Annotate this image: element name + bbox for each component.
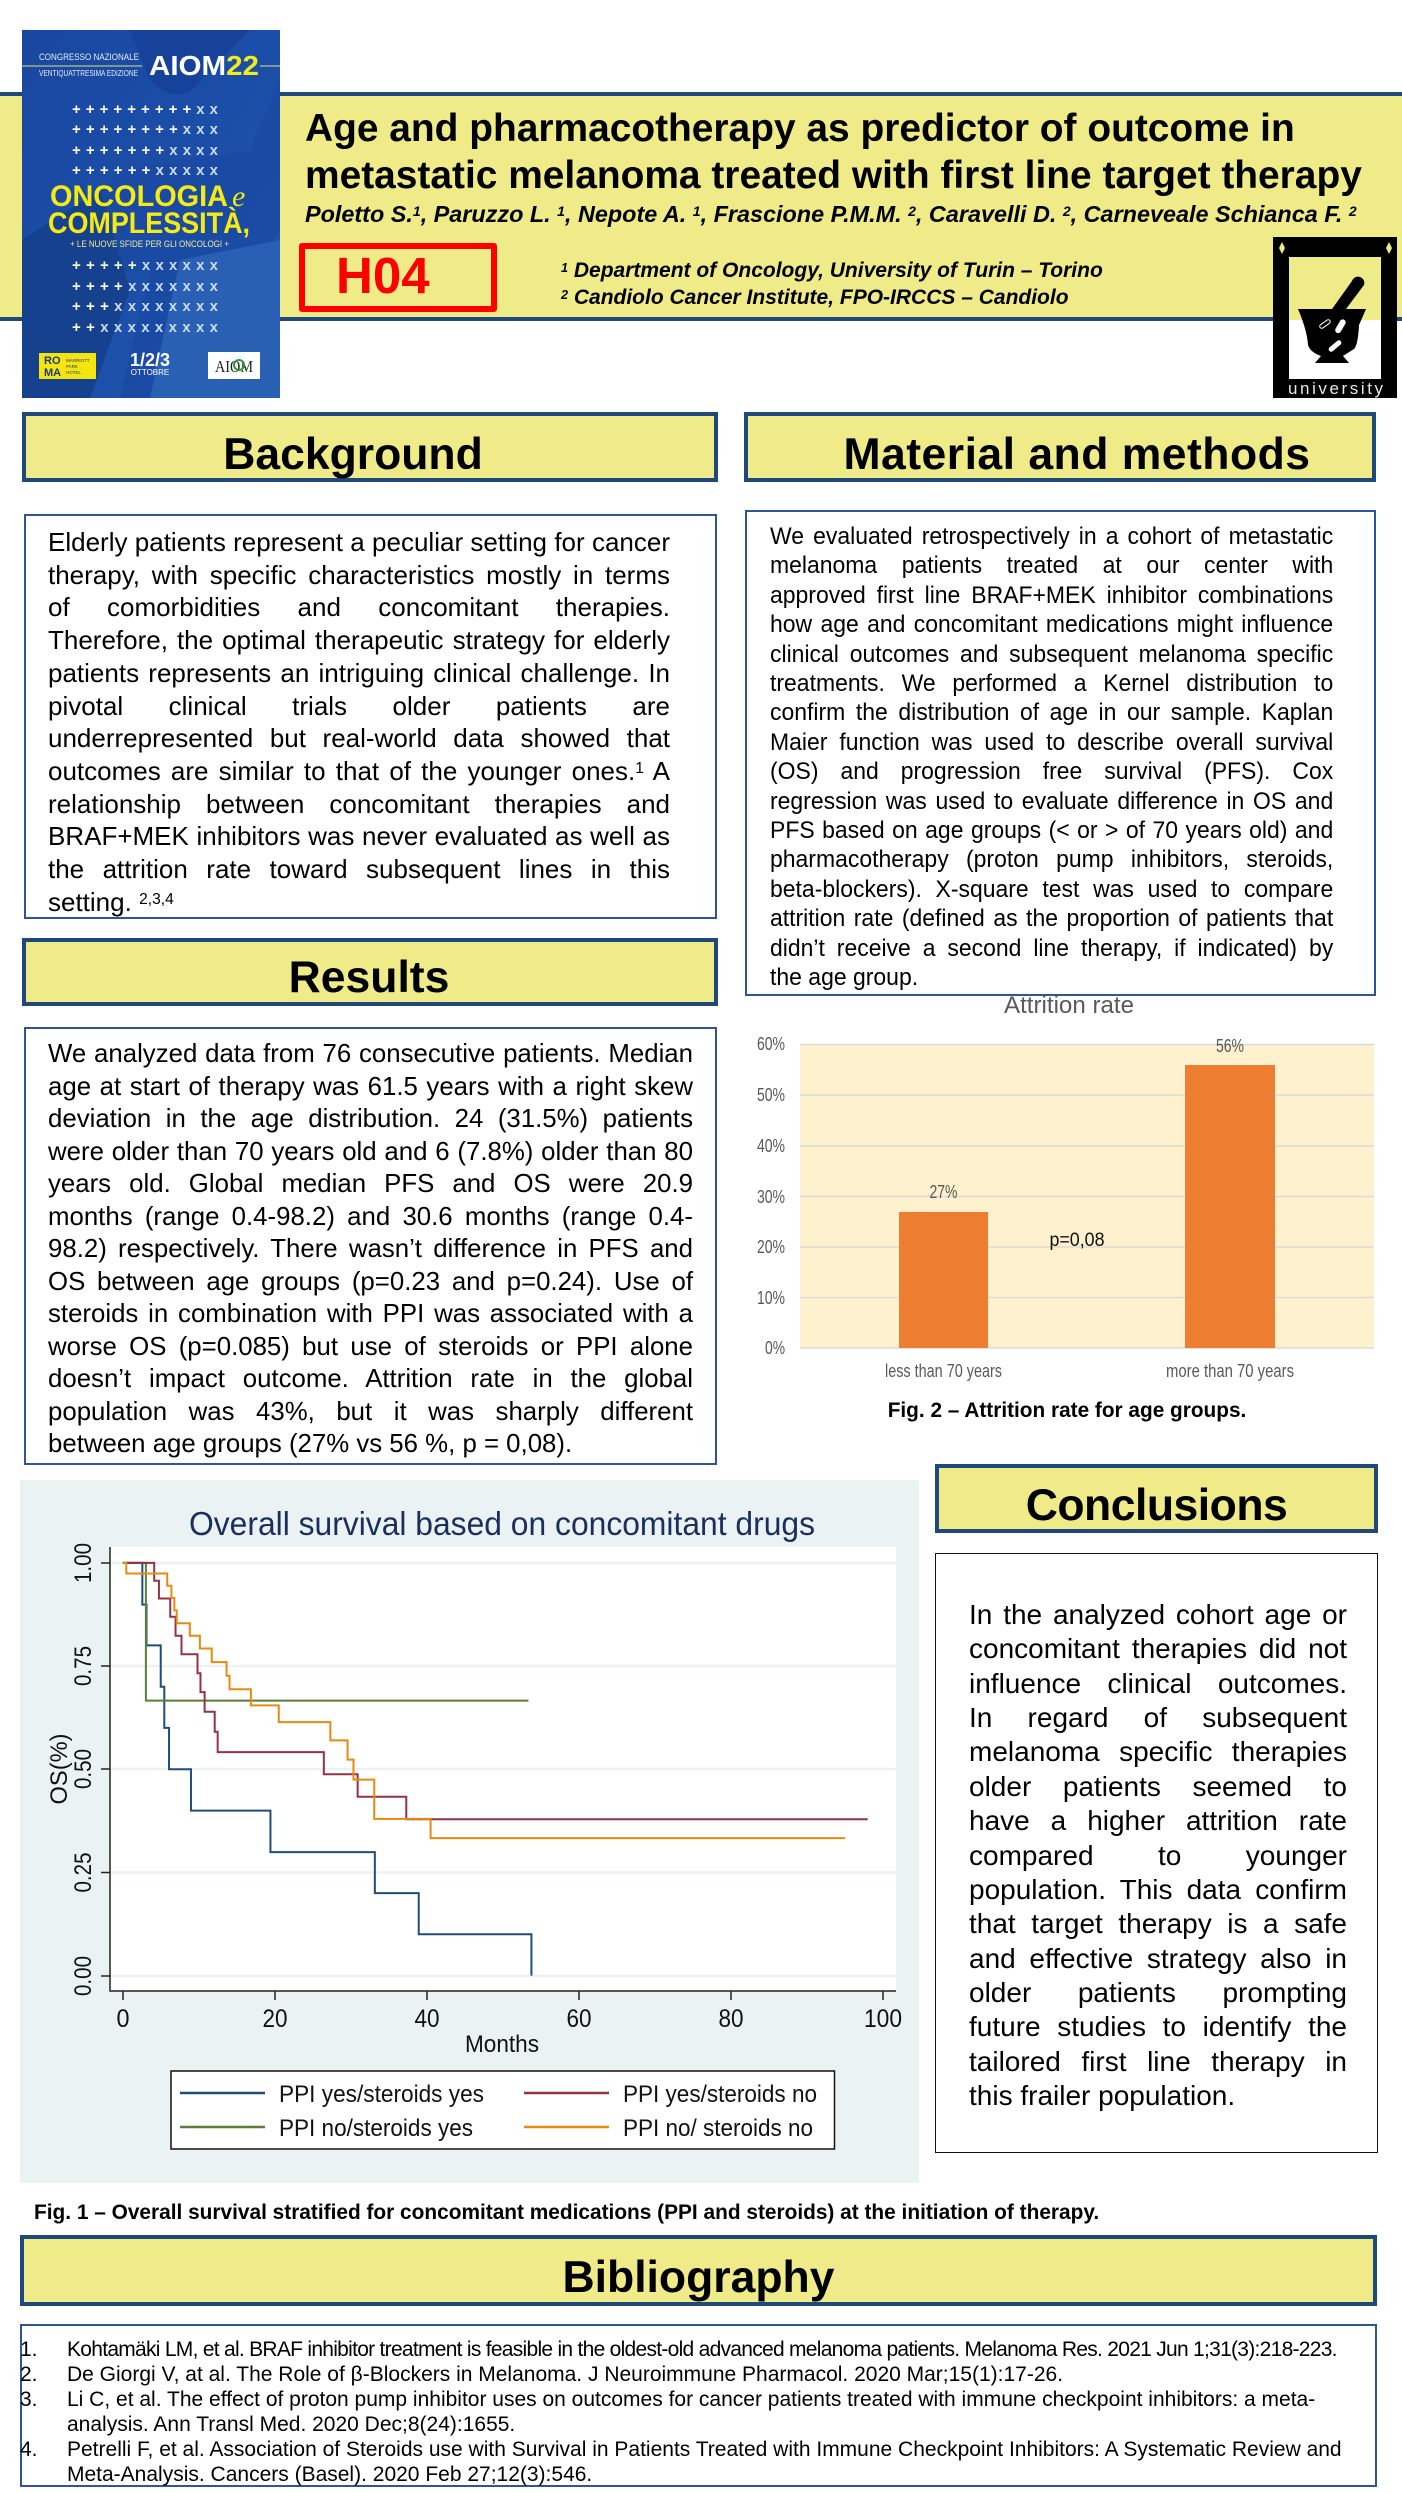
panel: references: De Giorgi V, at al. The Role of β-Blockers in Melanoma. J Neuroimmune Pharmacol. 2020 Mar;15(1):17-26. [67,2363,1063,2386]
congress poster image: + + x x x x x x x x x [72,319,219,336]
panel: methods text: pharmacotherapy (proton pump inhibitors, steroids, [770,846,1333,873]
panel: Kaplan-Meier overall survival chart: OS(%) [46,1734,73,1804]
panel: Kaplan-Meier overall survival chart [20,1480,919,2183]
congress poster image: HOTEL [66,370,82,375]
panel: references: 2. [20,2363,38,2386]
panel: references: 1. [20,2338,38,2361]
bar chart: attrition rate: 0% [765,1338,785,1358]
panel: conclusions text: compared to younger [969,1840,1347,1871]
panel: background text: patients represents an intriguing clinical challenge. In [48,658,670,688]
panel: conclusions text: tailored first line therapy in [969,2046,1347,2077]
panel: references: 4. [20,2438,38,2461]
header band [0,92,1402,321]
congress poster image: COMPLESSITÀ, [48,206,250,240]
panel: background text: relationship between concomitant therapies and [48,789,670,819]
caption: figure 1: Fig. 1 – Overall survival stratified for concomitant medications (PPI and steroids) at the initiation of therapy. [34,2201,1099,2224]
title: metastatic melanoma treated with first line target therapy [305,154,1362,197]
affiliations [560,259,1103,309]
heading: Background: Background [223,430,483,479]
panel: background text: underrepresented but real-world data showed that [48,723,670,753]
panel: results text: between age groups (27% vs 56 %, p = 0,08). [48,1430,572,1458]
congress poster image: MARRIOTT [66,358,90,363]
legend: PPI yes/steroids yes [279,2081,484,2108]
congress poster image: + + + + + + + x x x x [72,142,219,159]
panel: results text: years old. Global median PFS and OS were 20.9 [48,1170,693,1198]
heading: Background [22,412,718,482]
panel: results text: deviation in the age distribution. 24 (31.5%) patients [48,1105,693,1133]
panel: Kaplan-Meier overall survival chart: Months [465,2031,539,2058]
congress poster image: + + + x x x x x x x x [72,298,219,315]
panel: references [20,2324,1377,2487]
panel: references: 3. [20,2388,38,2411]
panel: references: Petrelli F, et al. Association of Steroids use with Survival in Patients Treated with Immune Checkpoint Inhibitors: A Systematic Review and [67,2438,1342,2461]
panel: conclusions text: concomitant therapies did not [969,1633,1347,1664]
heading: Material and methods: Material and methods [843,430,1311,479]
bar chart: attrition rate: less than 70 years [885,1361,1002,1381]
panel: Kaplan-Meier overall survival chart: 60 [566,2005,592,2033]
panel: Kaplan-Meier overall survival chart: 0.75 [70,1646,97,1686]
panel: methods text: treatments. We performed a Kernel distribution to [770,670,1333,697]
poster code H04: H04 [336,247,430,304]
affiliations: 1 Department of Oncology, University of Turin – Torino [561,259,1103,282]
panel: methods text: how age and concomitant medications might influence [770,611,1333,638]
legend [171,2071,834,2149]
panel: methods text: clinical outcomes and subsequent melanoma specific [770,641,1333,668]
panel: Kaplan-Meier overall survival chart: 80 [718,2005,744,2033]
congress poster image: 1/2/3 [130,350,170,370]
heading: Results: Results [289,953,449,1002]
chart title: Attrition rate [1004,992,1134,1019]
panel: results text: age at start of therapy was 61.5 years with a right skew [48,1072,693,1100]
panel: Kaplan-Meier overall survival chart: 0.50 [70,1749,97,1789]
panel: methods text: didn’t receive a second line therapy, if indicated) by [770,935,1333,962]
congress poster image: PARK [66,364,78,369]
panel: results text: doesn’t impact outcome. Attrition rate in the global [48,1365,693,1393]
bar: more than 70 years [1185,1065,1275,1348]
congress poster image: + + + + + + x x x x x [72,162,219,179]
panel: conclusions text: older patients prompting [969,1977,1347,2008]
panel: background text: pivotal clinical trials older patients are [48,691,670,721]
panel: background text: setting. 2,3,4 [48,887,174,917]
panel: conclusions text: In regard of subsequent [969,1702,1347,1733]
panel: background text: the attrition rate toward subsequent lines in this [48,854,670,884]
panel: Kaplan-Meier overall survival chart: 40 [414,2005,440,2033]
panel: methods text: PFS based on age groups (< or > of 70 years old) and [770,817,1333,844]
heading: Material and methods [744,412,1376,482]
heading: Conclusions [935,1464,1378,1533]
congress poster image: + + + + + x x x x x x [72,257,219,274]
curve: PPI no/steroids no [123,1563,845,1838]
panel: conclusions text: and effective strategy also in [969,1943,1347,1974]
congress poster image: MA [44,367,61,379]
panel: methods text: melanoma patients treated at our center with [770,552,1333,579]
panel: conclusions text: that target therapy is a safe [969,1908,1347,1939]
heading: Bibliography [20,2235,1377,2306]
congress poster image: VENTIQUATTRESIMA EDIZIONE [39,69,138,78]
congress poster image: ONCOLOGIA [50,180,228,213]
heading: Conclusions: Conclusions [1026,1481,1287,1530]
panel: background text: of comorbidities and concomitant therapies. [48,592,670,622]
panel: results text: steroids in combination with PPI was associated with a [48,1300,693,1328]
panel: references: Kohtamäki LM, et al. BRAF inhibitor treatment is feasible in the oldest-old advanced melanoma patients. Melanoma Res. 2021 Jun 1;31(3):218-223. [67,2338,1337,2361]
panel: results text: OS between age groups (p=0.23 and p=0.24). Use of [48,1268,693,1296]
affiliations: 2 Candiolo Cancer Institute, FPO-IRCCS – Candiolo [561,286,1069,309]
panel: Kaplan-Meier overall survival chart: 0.25 [70,1852,97,1892]
panel: conclusions text [935,1553,1378,2153]
heading: Bibliography: Bibliography [563,2253,834,2302]
panel: Kaplan-Meier overall survival chart: 1.00 [70,1543,97,1583]
bar chart: attrition rate: 27% [930,1182,958,1202]
panel: background text: therapy, with specific characteristics mostly in terms [48,560,670,590]
panel: methods text: beta-blockers). X-square test was used to compare [770,876,1333,903]
panel: background text [24,514,717,919]
bar chart: attrition rate: 10% [757,1288,785,1308]
panel: methods text: confirm the distribution of age in our sample. Kaplan [770,699,1333,726]
panel: results text: worse OS (p=0.085) but use of steroids or PPI alone [48,1332,693,1360]
panel: methods text: approved first line BRAF+MEK inhibitor combinations [770,582,1333,609]
bar chart: attrition rate: 30% [757,1187,785,1207]
panel: references: Meta-Analysis. Cancers (Basel). 2020 Feb 27;12(3):546. [67,2463,592,2486]
bar chart: attrition rate: 56% [1216,1036,1244,1056]
panel: references: Li C, et al. The effect of proton pump inhibitor uses on outcomes for cancer patients treated with immune checkpoint inhibitors: a meta- [67,2388,1315,2411]
panel: methods text: We evaluated retrospectively in a cohort of metastatic [770,523,1333,550]
panel: conclusions text: this frailer population. [969,2080,1235,2111]
bar chart: attrition rate: more than 70 years [1166,1361,1294,1381]
panel: methods text: (OS) and progression free survival (PFS). Cox [770,758,1333,785]
panel: background text: outcomes are similar to that of the younger ones.1 A [48,756,670,786]
panel: methods text: attrition rate (defined as the proportion of patients that [770,905,1333,932]
panel: background text: Therefore, the optimal therapeutic strategy for elderly [48,625,670,655]
caption: figure 2: Fig. 2 – Attrition rate for age groups. [888,1399,1246,1422]
panel: methods text [745,510,1376,996]
congress poster image: + LE NUOVE SFIDE PER GLI ONCOLOGI + [70,239,229,249]
panel: results text [24,1027,717,1465]
bar chart: attrition rate: 40% [757,1136,785,1156]
congress poster image: OTTOBRE [131,368,169,377]
panel: methods text: regression was used to evaluate difference in OS and [770,788,1333,815]
legend: PPI no/steroids yes [279,2115,473,2142]
panel: conclusions text: melanoma specific therapies [969,1736,1347,1767]
panel: Kaplan-Meier overall survival chart: 100 [864,2005,902,2033]
panel: background text: BRAF+MEK inhibitors was never evaluated as well as [48,821,670,851]
congress poster image: CONGRESSO NAZIONALE [39,52,139,62]
authors: Poletto S.1, Paruzzo L. 1, Nepote A. 1, Frascione P.M.M. 2, Caravelli D. 2, Carneveale Schianca F. 2 [305,201,1357,227]
panel: conclusions text: influence clinical outcomes. [969,1668,1347,1699]
panel: background text: Elderly patients represent a peculiar setting for cancer [48,527,670,557]
bar chart: attrition rate: 50% [757,1085,785,1105]
congress poster image: AIOM22 [149,50,259,81]
chart title: Overall survival based on concomitant drugs [189,1505,815,1542]
congress poster image: + + + + + + + + + x x [72,101,219,118]
bar chart: attrition rate: 20% [757,1237,785,1257]
title [305,107,1362,197]
title: Age and pharmacotherapy as predictor of outcome in [305,107,1295,150]
panel: methods text: the age group. [770,964,918,991]
curve: PPI yes/steroids yes [123,1563,531,1976]
heading: Results [22,938,718,1006]
panel: references: analysis. Ann Transl Med. 2020 Dec;8(24):1655. [67,2413,515,2436]
panel: conclusions text: older patients seemed to [969,1771,1347,1802]
panel: conclusions text: In the analyzed cohort age or [969,1599,1347,1630]
panel: Kaplan-Meier overall survival chart: 0 [116,2005,130,2033]
congress poster image: + + + + + + + + x x x [72,121,219,138]
panel: results text: were older than 70 years old and 6 (7.8%) older than 80 [48,1138,693,1166]
curve: PPI no/steroids yes [123,1563,528,1701]
congress poster image: e [232,180,245,213]
panel: conclusions text: population. This data confirm [969,1874,1347,1905]
bar chart: attrition rate: 60% [757,1034,785,1054]
university logo: mortar and pestle: university [1288,379,1384,398]
bar: less than 70 years [899,1212,988,1348]
poster code H04 [299,243,497,312]
congress poster image: + + + + x x x x x x x [72,278,219,295]
congress poster image: RO [44,355,61,367]
legend: PPI yes/steroids no [623,2081,817,2108]
panel: results text: 98.2) respectively. There wasn’t difference in PFS and [48,1235,693,1263]
congress poster image [22,30,280,398]
curve: PPI yes/steroids no [123,1563,868,1819]
panel: results text: months (range 0.4-98.2) and 30.6 months (range 0.4- [48,1202,693,1230]
university logo: mortar and pestle [1273,237,1397,398]
panel: Kaplan-Meier overall survival chart: 20 [262,2005,288,2033]
congress poster image: AIOM [215,357,253,376]
panel: conclusions text: future studies to identify the [969,2011,1347,2042]
p value: p=0,08 [1050,1230,1104,1251]
panel: Kaplan-Meier overall survival chart: 0.00 [70,1956,97,1996]
legend: PPI no/ steroids no [623,2115,813,2142]
panel: methods text: Maier function was used to describe overall survival [770,729,1333,756]
panel: results text: population was 43%, but it was sharply different [48,1398,693,1426]
panel: conclusions text: have a higher attrition rate [969,1805,1347,1836]
bar chart: attrition rate [757,992,1374,1381]
panel: results text: We analyzed data from 76 consecutive patients. Median [48,1040,693,1068]
